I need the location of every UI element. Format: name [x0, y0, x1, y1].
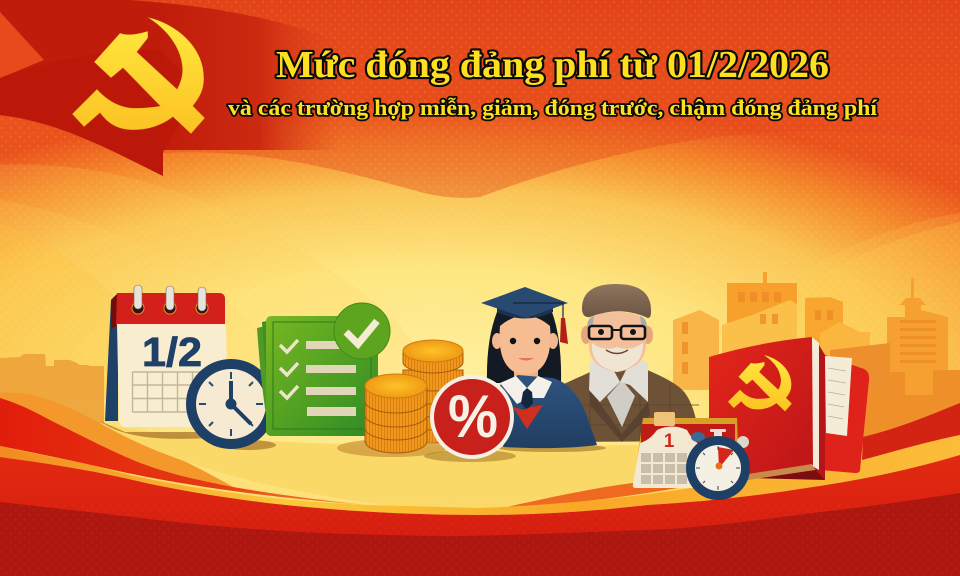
hair — [487, 312, 561, 383]
student — [481, 287, 606, 452]
checklist — [257, 303, 390, 436]
tie — [521, 388, 533, 410]
lapels — [590, 390, 650, 442]
face — [500, 316, 550, 375]
neck — [514, 365, 538, 383]
dark red base — [0, 493, 960, 576]
gown — [500, 375, 597, 448]
red scarf — [513, 405, 543, 429]
upper red band right — [862, 403, 960, 460]
percent badge: % — [448, 383, 498, 450]
jacket — [560, 362, 699, 442]
red header — [116, 293, 225, 325]
city skyline right — [673, 272, 960, 445]
hair — [587, 316, 647, 330]
red handbook back — [820, 355, 869, 473]
coins front stack — [337, 374, 447, 457]
hat — [582, 284, 651, 318]
stopwatch — [686, 429, 750, 500]
small calendar: 1 — [664, 431, 675, 452]
rings — [132, 285, 208, 314]
small calendar — [633, 412, 738, 488]
date label: 1/2 — [142, 329, 202, 375]
collar — [500, 376, 552, 404]
clock — [186, 359, 276, 450]
main red band — [0, 455, 960, 576]
ears — [581, 326, 591, 344]
coins back stack — [403, 340, 463, 443]
calendar 1/2 — [100, 285, 228, 439]
icon: hammer and sickle — [72, 17, 205, 134]
upper red band left — [0, 398, 367, 505]
ears — [492, 333, 502, 349]
heading: Mức đóng đảng phí từ 01/2/2026 — [276, 44, 829, 86]
flag — [0, 0, 340, 176]
collar — [589, 358, 648, 402]
subheading: và các trường hợp miễn, giảm, đóng trước, chậm đóng đảng phí — [228, 95, 878, 120]
shadow — [100, 421, 210, 439]
city skyline left — [0, 354, 233, 487]
graduation cap — [481, 287, 568, 344]
inner shirt — [607, 380, 635, 427]
glasses — [589, 326, 645, 339]
shadow — [498, 444, 606, 452]
yellow floor — [100, 420, 960, 515]
right orange swoosh — [507, 482, 700, 507]
title — [228, 44, 878, 120]
paper insert — [825, 356, 852, 436]
spine — [105, 293, 118, 421]
yellow strip — [0, 435, 960, 515]
beard — [592, 343, 643, 372]
date grid — [132, 372, 205, 412]
icon: check badge — [334, 303, 390, 359]
ribbon bands — [0, 398, 960, 576]
paper — [117, 324, 228, 427]
building — [673, 310, 719, 390]
list checks — [280, 340, 298, 398]
percent badge — [424, 375, 516, 462]
list lines — [306, 341, 356, 416]
face — [589, 312, 646, 372]
party book — [709, 337, 825, 480]
book emblem — [728, 355, 792, 411]
old man — [560, 284, 699, 442]
